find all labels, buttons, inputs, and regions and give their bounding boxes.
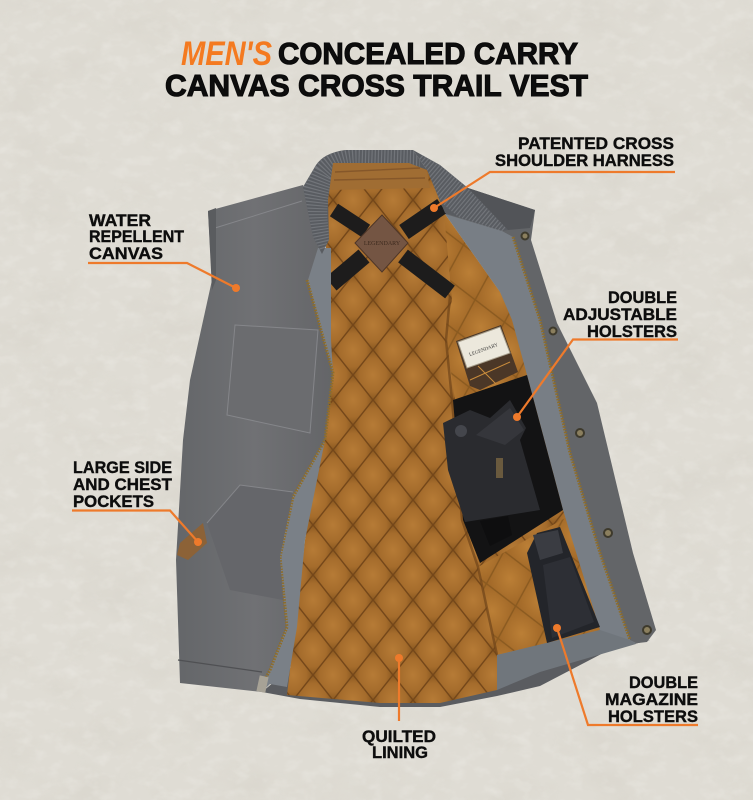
callout: large side and chest pockets: POCKETS [73, 492, 154, 511]
left shoulder stitching [215, 201, 302, 228]
back hem [262, 640, 650, 707]
right front lining [444, 213, 530, 400]
callout: patented cross shoulder harness [430, 134, 675, 212]
label tag [456, 325, 518, 390]
callout: water repellent canvas: CANVAS [89, 244, 163, 263]
callout: quilted lining: LINING [372, 743, 428, 762]
callout: quilted lining: QUILTED [362, 727, 436, 746]
callout: large side and chest pockets: LARGE SIDE [73, 458, 172, 477]
callout: double magazine holsters: DOUBLE [629, 673, 698, 692]
leather patch: LEGENDARY [364, 241, 401, 247]
zipper pull [256, 675, 269, 693]
callout: patented cross shoulder harness: PATENTED CROSS [518, 134, 674, 153]
callout: water repellent canvas: WATER [89, 211, 151, 230]
callout: water repellent canvas [88, 211, 240, 292]
callout: double adjustable holsters: HOLSTERS [587, 322, 677, 341]
right zipper facing [445, 214, 636, 672]
collar rib texture [312, 156, 420, 250]
callout: quilted lining [362, 654, 436, 762]
bottom hem seam [178, 660, 262, 672]
cross shoulder harness straps [331, 206, 450, 292]
callout: double magazine holsters: MAGAZINE [605, 690, 698, 709]
leather patch [355, 215, 408, 272]
holster backing [453, 375, 563, 563]
lining fold shadow [446, 296, 497, 655]
neck crease lines [334, 168, 425, 180]
callout: large side and chest pockets [72, 458, 202, 546]
left zipper facing [262, 248, 333, 692]
label tag: LEGENDARY [469, 343, 499, 358]
leather pocket tab [177, 523, 207, 560]
title line one: MEN'S [181, 35, 272, 73]
left armhole binding [208, 208, 216, 290]
inner back neck [328, 157, 430, 190]
lower pocket lining [478, 517, 600, 655]
chest pocket [227, 325, 318, 433]
callout: water repellent canvas: REPELLENT [89, 227, 185, 246]
side pocket [207, 485, 293, 600]
title: CONCEALED CARRY [278, 36, 578, 71]
quilted lining [287, 157, 606, 703]
callout: double adjustable holsters: DOUBLE [608, 288, 677, 307]
callout: double adjustable holsters [513, 288, 678, 421]
right collar leaf [468, 188, 535, 230]
callout: double adjustable holsters: ADJUSTABLE [563, 305, 677, 324]
right hem band [497, 630, 636, 690]
magazine holster [527, 527, 600, 643]
left front panel [176, 185, 333, 692]
collar right [413, 150, 508, 231]
title [165, 35, 588, 103]
callout: patented cross shoulder harness: SHOULDER HARNESS [495, 151, 674, 170]
callout: large side and chest pockets: AND CHEST [73, 475, 173, 494]
side pocket seam [207, 485, 293, 523]
right outer shell [445, 188, 656, 672]
left zipper [263, 280, 333, 683]
title line two: CANVAS CROSS TRAIL VEST [165, 68, 588, 103]
right collar ribs [420, 158, 505, 230]
upper holster [443, 400, 540, 546]
right zipper [513, 237, 630, 640]
snap buttons [522, 232, 651, 634]
vest illustration [176, 150, 656, 707]
collar left [303, 150, 427, 254]
callout: double magazine holsters: HOLSTERS [608, 707, 698, 726]
callout: double magazine holsters [553, 624, 698, 726]
